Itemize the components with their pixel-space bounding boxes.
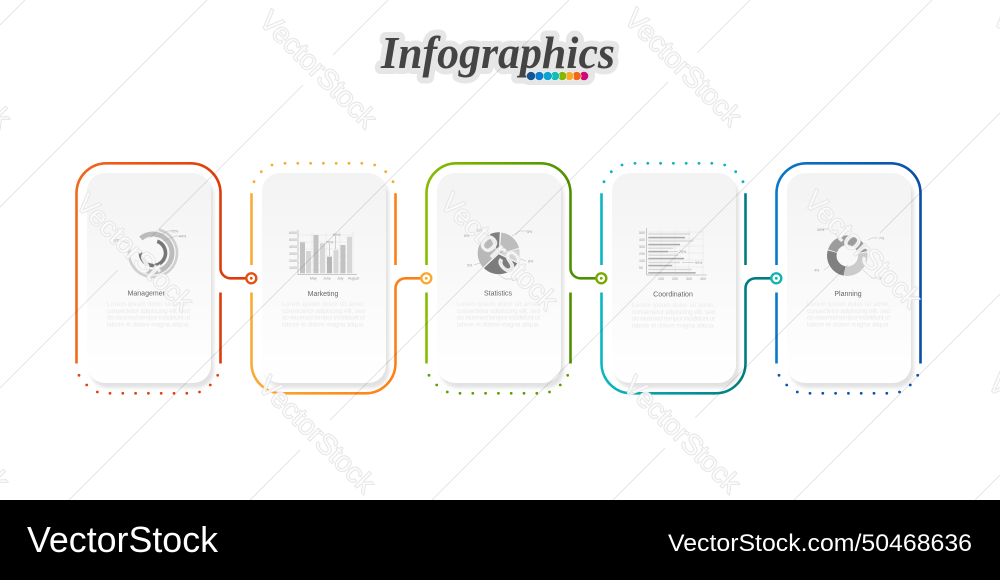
footer band bbox=[0, 500, 1000, 580]
dotted edge: planning bbox=[778, 374, 919, 395]
outline: coordination bbox=[602, 193, 771, 393]
heading: management: Management bbox=[128, 291, 168, 298]
icon: bar chart: 4000 bbox=[289, 245, 297, 249]
text block: management: labore et dolore magna aliqua. bbox=[107, 322, 190, 328]
icon: pie chart: 10% bbox=[476, 228, 484, 232]
card: coordination bbox=[612, 173, 739, 388]
icon: donut chart: 7% bbox=[879, 236, 885, 240]
icon: bar chart: 70% bbox=[326, 240, 334, 244]
icon: pie chart bbox=[464, 228, 534, 282]
watermark text repeats: VectorStock bbox=[619, 3, 749, 133]
text block: coordination: labore et dolore magna aliqua. bbox=[632, 322, 715, 330]
icon: radial chart bbox=[114, 224, 187, 282]
card: statistics bbox=[437, 173, 564, 388]
text block: coordination: consectetur adipiscing elit, sed bbox=[632, 309, 715, 316]
icon: bar chart: 3000 bbox=[289, 252, 297, 256]
watermark text repeats: VectorStock bbox=[435, 187, 565, 317]
dotted edge: marketing bbox=[253, 162, 394, 183]
icon: horizontal bar chart: 100 bbox=[639, 259, 645, 263]
icon: radial chart: 75% bbox=[171, 230, 179, 234]
text block: marketing: labore et dolore magna aliqua. bbox=[282, 322, 365, 328]
text block: planning bbox=[807, 301, 890, 328]
icon: pie chart: 8% bbox=[528, 260, 534, 264]
text block: planning: consectetur adipiscing elit, sed bbox=[807, 308, 890, 315]
icon: bar chart: July bbox=[337, 276, 344, 280]
card: planning bbox=[787, 173, 914, 388]
watermark text repeats: VectorStock bbox=[252, 370, 382, 500]
panel: statistics bbox=[426, 163, 606, 395]
icon: horizontal bar chart: 200 bbox=[639, 252, 645, 256]
icon: horizontal bar chart: 70% bbox=[679, 250, 687, 254]
text block: coordination: do eiusmod tempor incididunt ut bbox=[632, 316, 715, 323]
icon: bar chart: August bbox=[348, 276, 359, 280]
text block: marketing bbox=[282, 301, 365, 328]
panel: marketing bbox=[252, 162, 431, 393]
text block: planning: Lorem ipsum dolor sit amet, bbox=[807, 301, 890, 308]
dotted edge: statistics bbox=[428, 374, 569, 395]
heading: coordination: Coordination bbox=[653, 291, 693, 298]
text block: planning: do eiusmod tempor incididunt ut bbox=[807, 315, 890, 322]
icon: bar chart bbox=[289, 230, 359, 280]
icon: horizontal bar chart: 200 bbox=[672, 277, 678, 281]
footer band: VectorStock bbox=[27, 519, 219, 560]
text block: management bbox=[107, 301, 190, 328]
text block: management: do eiusmod tempor incididunt ut bbox=[107, 315, 190, 322]
icon: donut chart: 4% bbox=[814, 268, 820, 272]
text block: statistics bbox=[457, 301, 540, 328]
icon: bar chart: 2000 bbox=[289, 259, 297, 263]
text block: statistics: Lorem ipsum dolor sit amet, bbox=[457, 301, 540, 308]
icon: pie chart: 5% bbox=[512, 278, 518, 282]
text block: management: consectetur adipiscing elit, sed bbox=[107, 308, 190, 315]
icon: horizontal bar chart: 90% bbox=[695, 261, 703, 265]
watermark text repeats: VectorStock bbox=[618, 370, 748, 500]
icon: pie chart: 5% bbox=[527, 230, 533, 234]
text block: planning: labore et dolore magna aliqua. bbox=[807, 322, 890, 328]
heading: marketing: Marketing bbox=[308, 291, 338, 298]
icon: radial chart: 63% bbox=[114, 238, 122, 242]
icon: horizontal bar chart: 300 bbox=[639, 245, 645, 249]
card: management bbox=[87, 173, 214, 388]
text block: management: Lorem ipsum dolor sit amet, bbox=[107, 301, 190, 308]
text block: statistics: do eiusmod tempor incididunt ut bbox=[457, 315, 540, 322]
text block: marketing: Lorem ipsum dolor sit amet, bbox=[282, 301, 365, 308]
card: marketing bbox=[262, 173, 389, 388]
connector node: coordination bbox=[771, 273, 781, 283]
icon: bar chart: 6000 bbox=[289, 231, 297, 235]
icon: pie chart: 6% bbox=[464, 234, 470, 238]
icon: horizontal bar chart bbox=[639, 228, 707, 281]
text block: coordination bbox=[632, 302, 715, 330]
icon: donut chart: 3% bbox=[879, 276, 885, 280]
connector node: statistics bbox=[596, 273, 606, 283]
title: Infographics bbox=[380, 27, 615, 78]
icon: horizontal bar chart: 400 bbox=[639, 238, 645, 242]
watermark text repeats: VectorStock bbox=[254, 5, 384, 135]
icon: radial chart: 44% bbox=[179, 234, 187, 238]
icon: horizontal bar chart: 300 bbox=[686, 277, 692, 281]
connector node: management bbox=[246, 273, 256, 283]
icon: donut chart: 26% bbox=[817, 228, 825, 232]
connector node: marketing bbox=[421, 273, 431, 283]
heading: planning: Planning bbox=[834, 291, 862, 298]
text block: statistics: consectetur adipiscing elit, sed bbox=[457, 308, 540, 315]
icon: horizontal bar chart: 400 bbox=[700, 277, 706, 281]
text block: statistics: labore et dolore magna aliqua. bbox=[457, 322, 540, 328]
footer band: VectorStock.com/50468636 bbox=[668, 530, 972, 557]
heading: statistics: Statistics bbox=[484, 291, 512, 298]
icon: donut chart bbox=[814, 228, 885, 280]
outline: planning bbox=[776, 163, 920, 364]
icon: bar chart: 1000 bbox=[289, 266, 297, 270]
icon: horizontal bar chart: 500 bbox=[639, 231, 645, 235]
text block: marketing: do eiusmod tempor incididunt ut bbox=[282, 315, 365, 322]
panel: coordination bbox=[602, 162, 781, 393]
outline: management bbox=[76, 163, 246, 364]
outline: marketing bbox=[252, 193, 421, 393]
outline: statistics bbox=[426, 163, 596, 364]
icon: pie chart: 5% bbox=[467, 264, 473, 268]
watermark text repeats: VectorStock bbox=[70, 188, 200, 318]
panel: management bbox=[76, 163, 256, 395]
panel: planning bbox=[776, 163, 920, 395]
dotted edge: management bbox=[78, 374, 219, 395]
icon: bar chart: 90% bbox=[333, 233, 341, 237]
icon: bar chart: May bbox=[310, 276, 317, 280]
text block: coordination: Lorem ipsum dolor sit amet, bbox=[632, 302, 715, 309]
icon: horizontal bar chart: 50 bbox=[639, 266, 643, 270]
dotted edge: coordination bbox=[603, 162, 744, 183]
watermark text repeats: VectorStock bbox=[798, 185, 928, 315]
icon: bar chart: 5000 bbox=[289, 238, 297, 242]
icon: bar chart: June bbox=[323, 276, 331, 280]
icon: horizontal bar chart: 100 bbox=[658, 277, 664, 281]
text block: marketing: consectetur adipiscing elit, sed bbox=[282, 308, 365, 315]
